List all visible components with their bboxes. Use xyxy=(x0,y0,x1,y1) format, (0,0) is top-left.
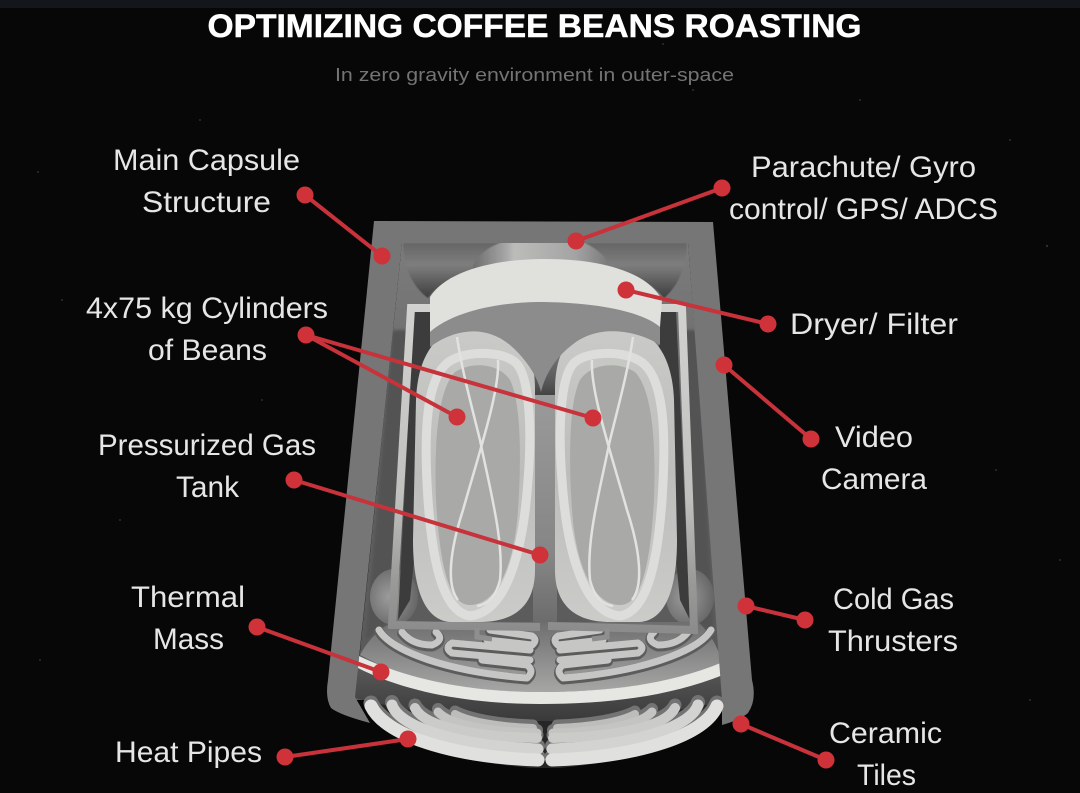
side thruster spheres xyxy=(370,569,714,625)
label: cylinders of beans: 4x75 kg Cylinders xyxy=(86,292,328,325)
leader: cold gas thrusters xyxy=(738,598,814,628)
leader: video camera xyxy=(716,356,820,448)
cavity back wall xyxy=(355,243,723,700)
right frame xyxy=(548,308,694,630)
leader: heat pipes xyxy=(276,730,416,766)
label: pressurized gas tank: Pressurized Gas xyxy=(98,429,316,462)
label: thermal mass xyxy=(131,581,245,656)
lower dark pipe bay xyxy=(367,695,722,768)
thermal mass top surface xyxy=(360,622,723,692)
upper corner bowls xyxy=(403,243,687,298)
right thermal coil shadows xyxy=(555,632,711,680)
right cylinder wires xyxy=(589,337,639,606)
dryer filter ring xyxy=(430,259,662,332)
cylinder inner xyxy=(436,365,520,605)
heat pipes left xyxy=(371,705,538,760)
parachute and gyro housing xyxy=(473,242,609,275)
leader: main capsule structure xyxy=(296,186,390,264)
dark hollow under dryer xyxy=(430,330,660,420)
heat pipe shadows xyxy=(371,702,717,757)
label: video camera: Video xyxy=(835,421,913,454)
leader: thermal mass xyxy=(248,618,390,680)
right cylinder ring xyxy=(560,353,664,616)
capsule cutaway illustration xyxy=(327,221,754,768)
label: dryer filter: Dryer/ Filter xyxy=(790,308,958,341)
label: video camera xyxy=(821,421,927,496)
label: pressurized gas tank xyxy=(98,429,316,504)
label: pressurized gas tank: Tank xyxy=(176,471,240,504)
left frame xyxy=(392,308,540,627)
label: cylinders of beans: of Beans xyxy=(148,334,267,367)
top band xyxy=(0,0,1080,8)
label: main capsule structure: Main Capsule xyxy=(113,144,300,177)
right bean cylinder xyxy=(555,325,677,622)
label: cold gas thrusters: Cold Gas xyxy=(833,583,954,616)
dryer underside xyxy=(430,302,660,392)
cylinder crossing wires xyxy=(451,337,501,606)
label: cold gas thrusters: Thrusters xyxy=(828,625,958,658)
thermal mass bright edge xyxy=(358,656,723,704)
label: parachute gyro xyxy=(729,151,998,226)
label: ceramic tiles xyxy=(829,717,942,792)
left thermal coils xyxy=(379,630,535,678)
label: cold gas thrusters xyxy=(828,583,958,658)
label: main capsule structure: Structure xyxy=(142,186,271,219)
leader: gas tank xyxy=(286,472,548,564)
leader: parachute xyxy=(568,180,730,250)
label: video camera: Camera xyxy=(821,463,927,496)
left frame strut xyxy=(477,628,492,639)
leader: dryer filter xyxy=(618,282,776,332)
label: thermal mass: Mass xyxy=(153,623,224,656)
left thermal coil shadows xyxy=(379,632,535,680)
label: heat pipes: Heat Pipes xyxy=(115,736,262,769)
capsule walls xyxy=(327,221,754,725)
leader: ceramic tiles xyxy=(732,716,834,768)
label: cylinders of beans xyxy=(86,292,328,367)
title: OPTIMIZING COFFEE BEANS ROASTING xyxy=(208,8,862,44)
side shading in cavity xyxy=(366,330,714,640)
central column xyxy=(533,395,557,627)
star field xyxy=(37,43,1061,701)
label: parachute gyro: Parachute/ Gyro xyxy=(751,151,976,184)
leader: cylinders xyxy=(298,326,602,426)
right cylinder inner xyxy=(570,365,654,605)
label: ceramic tiles: Ceramic xyxy=(829,717,942,750)
dark strips beside cylinders xyxy=(398,310,690,620)
heat pipes right xyxy=(552,705,717,760)
label: main capsule structure xyxy=(113,144,300,219)
label: thermal mass: Thermal xyxy=(131,581,245,614)
cylinder ring xyxy=(426,353,530,616)
label: ceramic tiles: Tiles xyxy=(857,759,916,792)
label: parachute gyro: control/ GPS/ ADCS xyxy=(729,193,998,226)
right frame strut xyxy=(592,628,607,639)
left bean cylinder xyxy=(413,325,535,622)
subtitle: In zero gravity environment in outer-space xyxy=(335,65,734,85)
right thermal coils xyxy=(555,630,711,678)
thermal mass plate underside xyxy=(355,664,723,721)
